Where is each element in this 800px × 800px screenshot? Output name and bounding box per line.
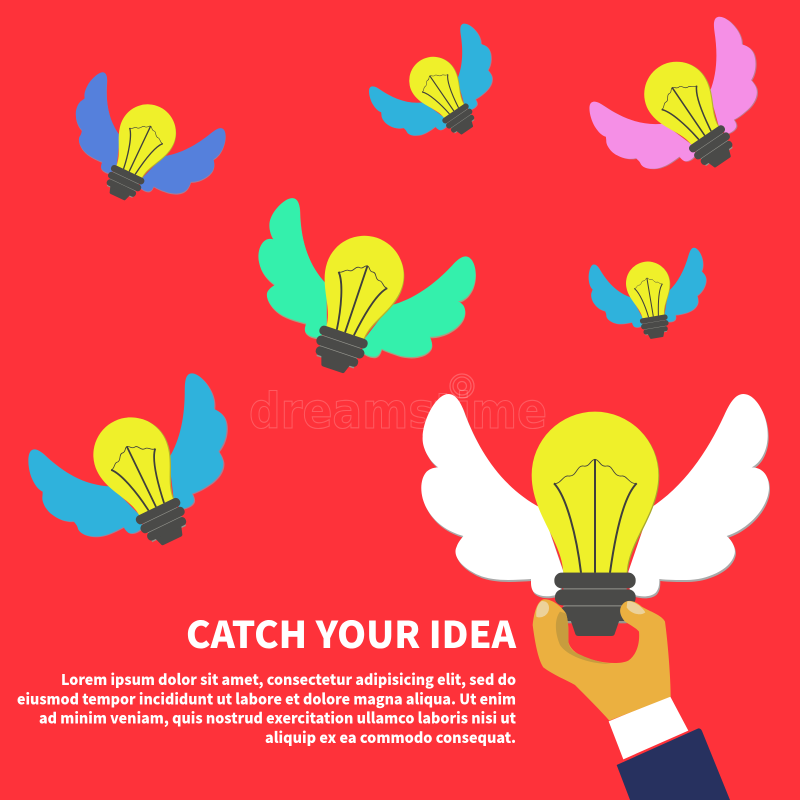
body text: ad minim veniam, quis nostrud exercitation ullamco laboris nisi ut	[39, 708, 516, 728]
flying bulb: green wings	[230, 193, 483, 404]
hand holding the bulb	[533, 599, 731, 800]
flying bulb: purple-blue wings	[50, 68, 231, 229]
watermark	[249, 374, 547, 440]
sleeve	[617, 728, 731, 800]
shirt cuff	[609, 696, 688, 759]
flying bulb: pink wings	[582, 11, 795, 211]
body text: Lorem ipsum dolor sit amet, consectetur adipisicing elit, sed do	[61, 669, 516, 690]
fingernail	[627, 601, 645, 614]
main bulb with white wings	[421, 394, 770, 636]
flying bulb: blue wings, lower left	[20, 368, 263, 584]
flying bulb: small blue wings, right	[586, 246, 715, 347]
watermark wordmark: dreamstime	[249, 383, 547, 440]
flying bulb: blue wings, top centre	[364, 20, 520, 167]
body text	[17, 669, 516, 748]
thumb shadow	[556, 612, 612, 664]
light bulb	[532, 412, 659, 636]
title: CATCH YOUR IDEA	[186, 605, 517, 659]
watermark spiral	[450, 374, 474, 398]
palm and fingers	[533, 599, 671, 721]
body text: aliquip ex ea commodo consequat.	[265, 727, 516, 748]
thumbnail	[536, 601, 549, 617]
body text: eiusmod tempor incididunt ut labore et dolore magna aliqua. Ut enim	[17, 688, 516, 710]
white wings	[421, 394, 770, 598]
